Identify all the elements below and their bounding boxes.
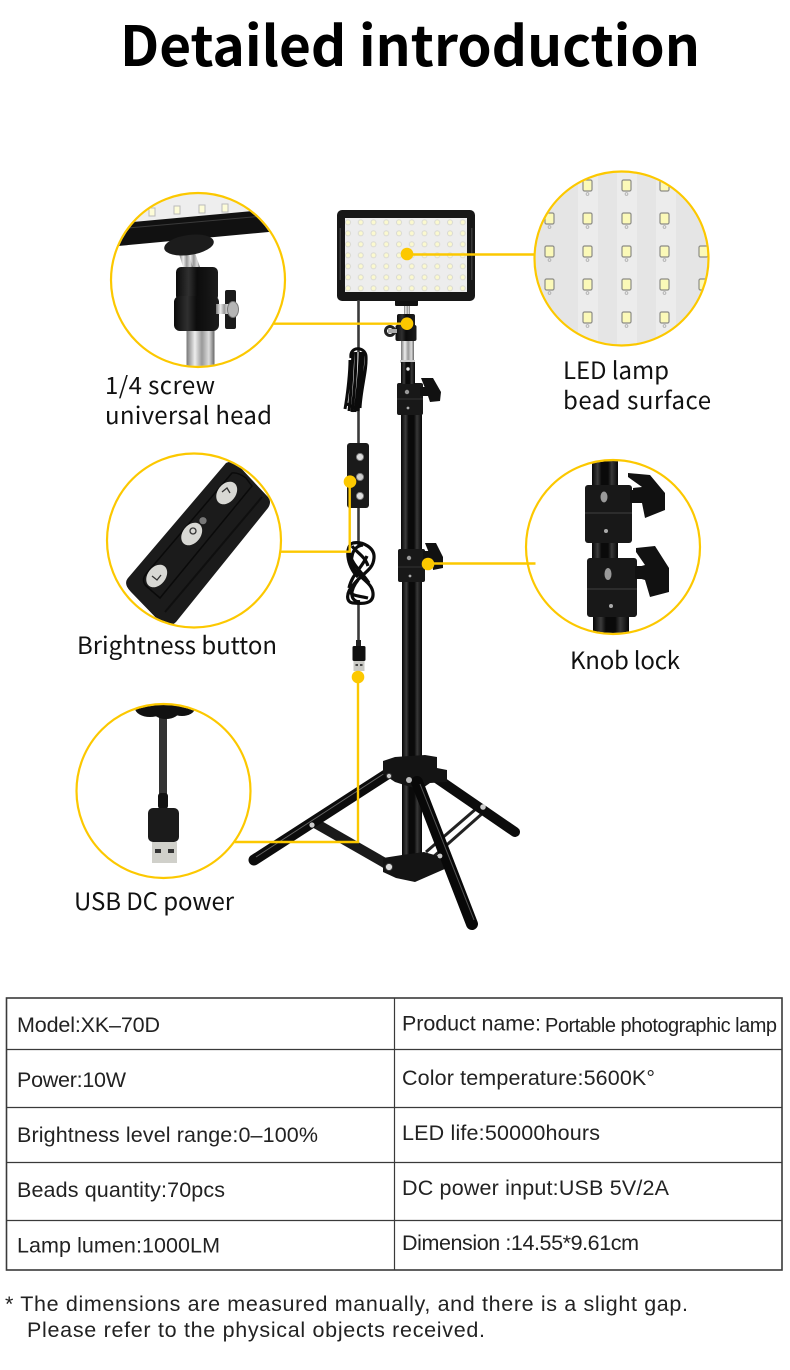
- detail circle: remote buttons: [107, 454, 281, 628]
- leader line: [422, 558, 536, 570]
- footnote: * The dimensions are measured manually, and there is a slight gap.: [5, 1292, 688, 1316]
- right column specs: LED life:50000hours: [402, 1121, 600, 1145]
- callout: USB DC power: [74, 671, 364, 917]
- LED light panel: [337, 210, 475, 301]
- callout: knob lock: [422, 459, 700, 676]
- leader line: [401, 248, 535, 260]
- telescopic pole: [401, 412, 422, 750]
- callout: 1/4 screw universal head: [100, 192, 413, 431]
- left column specs: Beads quantity:70pcs: [17, 1178, 225, 1202]
- right column specs: DC power input:USB 5V/2A: [402, 1176, 670, 1200]
- title: Detailed introduction: [120, 2, 700, 82]
- upper knob clamp: [397, 378, 441, 415]
- power cable: [357, 300, 360, 642]
- lower cable coil: [348, 543, 374, 603]
- ball head: [386, 300, 418, 384]
- leader line: [274, 317, 413, 330]
- label: LED lamp: [563, 351, 669, 386]
- left column specs: Lamp lumen:1000LM: [17, 1234, 220, 1258]
- lower knob clamp: [398, 543, 443, 582]
- right column specs: Portable photographic lamp: [545, 1015, 777, 1037]
- callout: LED lamp bead surface: [401, 171, 711, 416]
- label: bead surface: [563, 381, 711, 416]
- detail circle: ball head: [100, 192, 290, 370]
- right column specs: Dimension :14.55*9.61cm: [402, 1231, 639, 1255]
- detail circle: knob clamps: [526, 459, 700, 640]
- left column specs: Model:XK–70D: [17, 1013, 160, 1037]
- label: Knob lock: [570, 641, 680, 676]
- label: [563, 351, 711, 416]
- brightness remote on cable: [347, 443, 369, 508]
- left column specs: Brightness level range:0–100%: [17, 1123, 318, 1147]
- left column specs: Power:10W: [17, 1068, 127, 1092]
- table grid: [6, 998, 782, 1270]
- label: Brightness button: [77, 626, 277, 661]
- leader line: [235, 671, 364, 842]
- product: tripod stand with light panel: [254, 210, 515, 924]
- specification table: [6, 998, 782, 1270]
- left column specs: [17, 1013, 318, 1258]
- footnote: Please refer to the physical objects received.: [27, 1318, 485, 1342]
- USB plug on cable: [352, 640, 366, 671]
- callout: brightness button: [77, 454, 356, 661]
- right column specs: Product name:: [402, 1012, 541, 1036]
- footnote: [5, 1292, 688, 1342]
- label: 1/4 screw: [105, 366, 215, 401]
- label: [105, 366, 272, 431]
- leader line: [281, 475, 356, 552]
- detail circle: LED beads: [534, 171, 710, 347]
- upper cable coil: [345, 349, 366, 412]
- right column specs: [402, 1012, 777, 1255]
- detail circle: USB plug: [76, 699, 250, 878]
- label: USB DC power: [74, 882, 235, 917]
- right column specs: Color temperature:5600K°: [402, 1066, 655, 1090]
- tripod legs and base: [254, 740, 515, 924]
- label: universal head: [105, 396, 272, 431]
